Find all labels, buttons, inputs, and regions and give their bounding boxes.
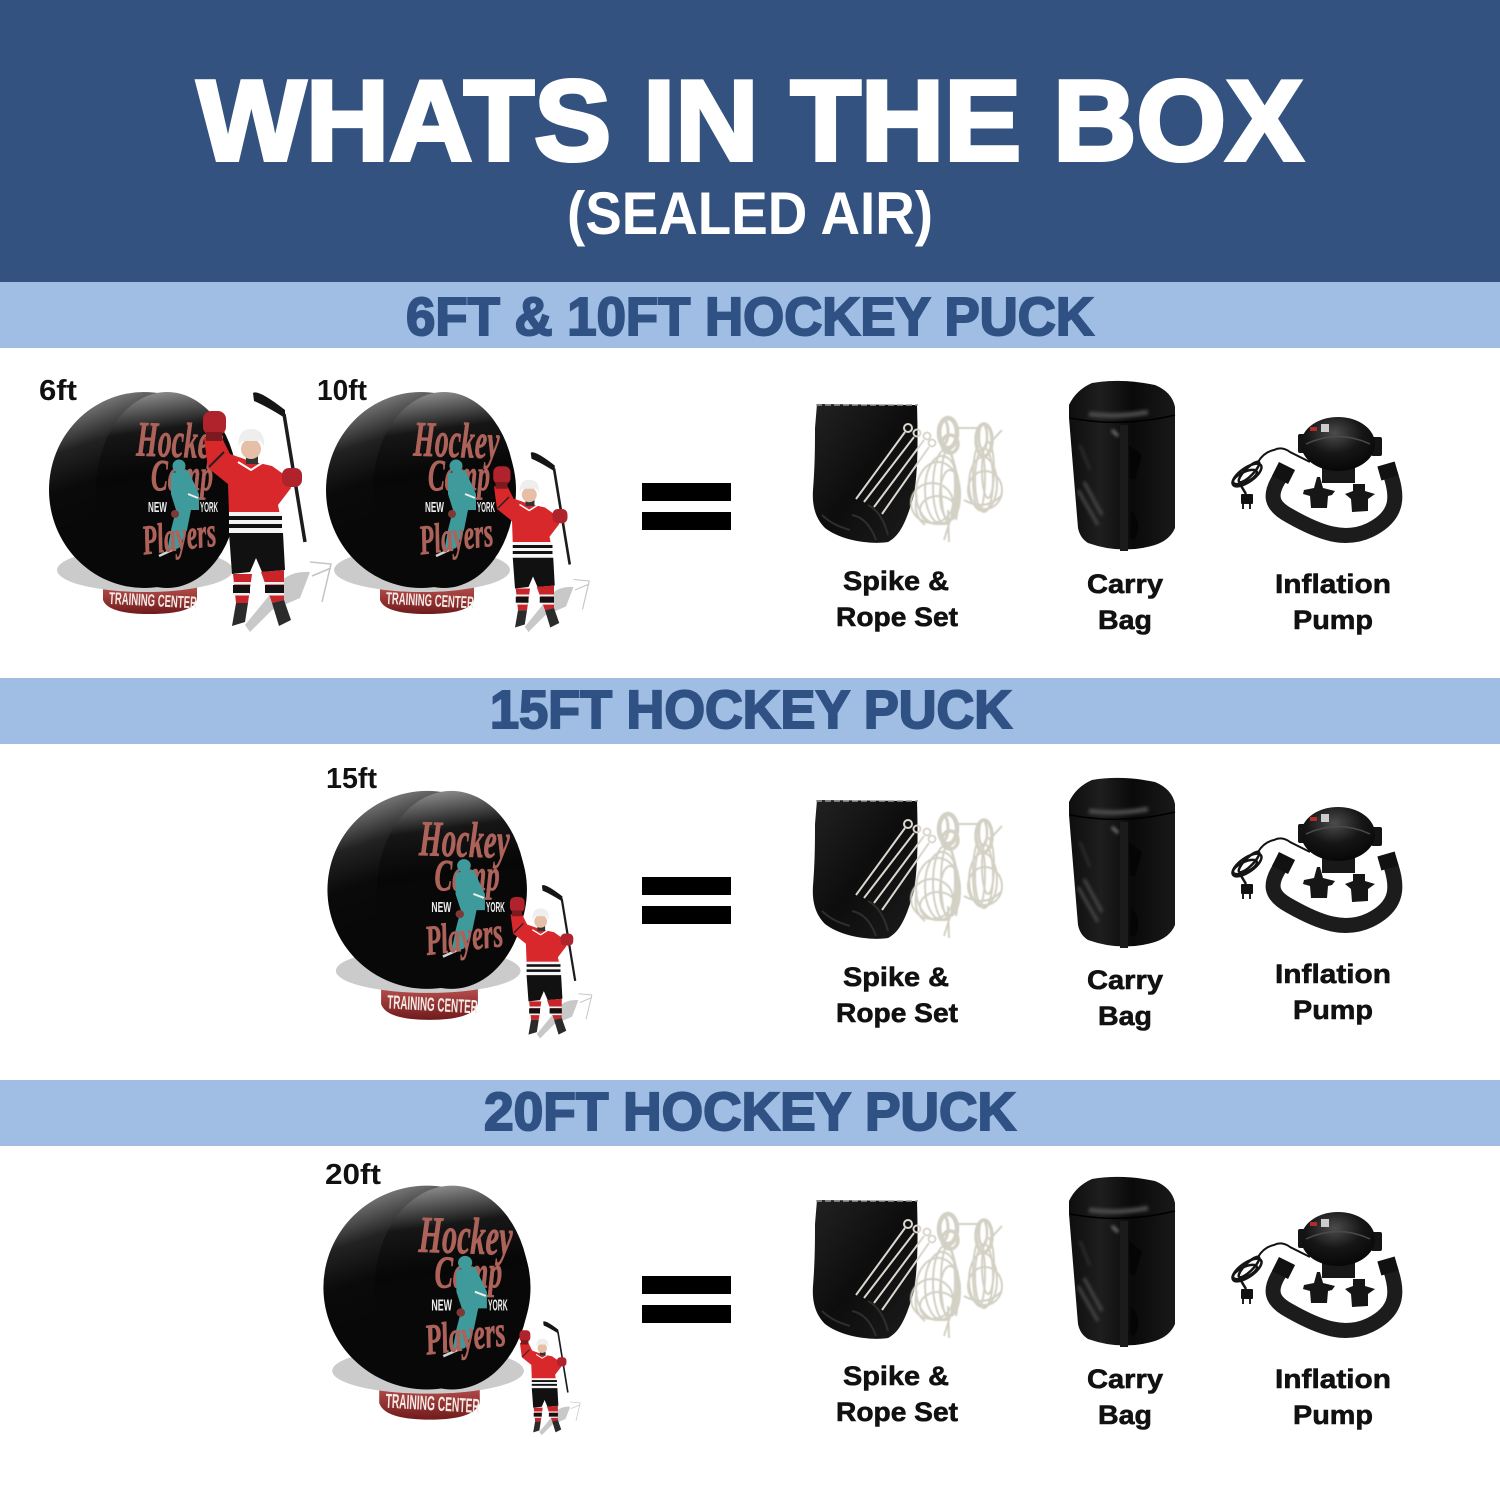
section band: 15ft [0, 678, 1500, 744]
equals sign: row 1 [642, 483, 731, 530]
inflation pump: row 3: Inflation [1275, 1364, 1391, 1394]
panel: 6ft puck with player: YORK [200, 499, 218, 516]
panel: 20ft puck with player: 20ft [325, 1159, 381, 1191]
panel: 6ft puck with player: Hockey [135, 411, 224, 470]
carry bag: row 3 [1069, 1177, 1175, 1430]
carry bag: row 2: Bag [1098, 1001, 1152, 1031]
spike and rope set: row 2 [813, 800, 1002, 1028]
panel: 10ft puck with player: TRAINING CENTER [386, 589, 474, 612]
panel: 15ft puck with player: Hockey [418, 811, 511, 870]
carry bag: row 1: Bag [1098, 605, 1152, 635]
section band: 20ft [0, 1080, 1500, 1146]
panel: 10ft puck with player: Camp [428, 451, 490, 500]
inflation pump: row 1: Inflation [1275, 569, 1391, 599]
panel: 20ft puck with player: Hockey [417, 1206, 514, 1267]
inflation pump: row 1 [1229, 417, 1395, 635]
spike and rope set: row 3: Rope Set [836, 1397, 958, 1427]
equals sign: row 3 [642, 1276, 731, 1323]
equals sign: row 2 [642, 877, 731, 924]
panel: 20ft puck with player: TRAINING CENTER [385, 1391, 480, 1418]
panel: 20ft puck with player: Camp [435, 1248, 502, 1298]
panel: 10ft puck with player: Players [416, 510, 496, 564]
inflation pump: row 2: Pump [1293, 995, 1373, 1025]
section band: 20ft: 20FT HOCKEY PUCK [484, 1082, 1016, 1142]
section band: 15ft: 15FT HOCKEY PUCK [490, 680, 1012, 740]
inflation pump: row 2: Inflation [1275, 959, 1391, 989]
spike and rope set: row 3: Spike & [843, 1361, 949, 1391]
title: WHATS IN THE BOX [197, 58, 1303, 185]
carry bag: row 1: Carry [1087, 569, 1163, 599]
spike and rope set: row 2: Spike & [843, 962, 949, 992]
carry bag: row 1 [1069, 381, 1175, 635]
panel: 15ft puck with player: TRAINING CENTER [387, 991, 478, 1018]
inflation pump: row 3: Pump [1293, 1400, 1373, 1430]
panel: 6ft puck with player: Players [139, 510, 219, 564]
carry bag: row 2 [1069, 778, 1175, 1031]
spike and rope set: row 1 [813, 404, 1002, 632]
subtitle: (SEALED AIR) [567, 180, 933, 247]
spike and rope set: row 1: Rope Set [836, 602, 958, 632]
panel: 6ft puck with player: TRAINING CENTER [109, 589, 197, 612]
panel: 6ft puck with player: 6ft [39, 375, 77, 407]
inflation pump: row 1: Pump [1293, 605, 1373, 635]
panel: 10ft puck with player: YORK [477, 499, 495, 516]
panel: 10ft puck with player: NEW [425, 499, 444, 516]
spike and rope set: row 1: Spike & [843, 566, 949, 596]
panel: 20ft puck with player: NEW [431, 1298, 453, 1314]
panel: 10ft puck with player: 10ft [317, 375, 367, 407]
carry bag: row 3: Carry [1087, 1364, 1163, 1394]
section band: 6ft and 10ft: 6FT & 10FT HOCKEY PUCK [406, 287, 1094, 347]
panel: 6ft puck with player: Camp [151, 451, 213, 500]
carry bag: row 2: Carry [1087, 965, 1163, 995]
panel: 15ft puck with player: YORK [486, 899, 505, 916]
spike and rope set: row 3 [813, 1200, 1002, 1427]
panel: 20ft puck with player: Players [421, 1307, 508, 1364]
panel: 10ft puck with player: Hockey [412, 411, 501, 470]
panel: 20ft puck with player [323, 1159, 580, 1435]
panel: 15ft puck with player: 15ft [326, 763, 377, 795]
panel: 15ft puck with player: Camp [435, 851, 500, 900]
inflation pump: row 2 [1229, 807, 1395, 1025]
panel: 6ft puck with player: NEW [148, 499, 167, 516]
panel: 15ft puck with player [326, 763, 592, 1038]
panel: 15ft puck with player: Players [422, 909, 505, 965]
inflation pump: row 3 [1229, 1212, 1395, 1430]
spike and rope set: row 2: Rope Set [836, 998, 958, 1028]
panel: 15ft puck with player: NEW [431, 899, 452, 916]
panel: 10ft puck with player [317, 375, 589, 632]
carry bag: row 3: Bag [1098, 1400, 1152, 1430]
panel: 20ft puck with player: YORK [488, 1298, 508, 1314]
panel: 6ft puck with player [39, 375, 331, 632]
header banner [0, 0, 1500, 282]
section band: 6ft and 10ft [0, 282, 1500, 348]
